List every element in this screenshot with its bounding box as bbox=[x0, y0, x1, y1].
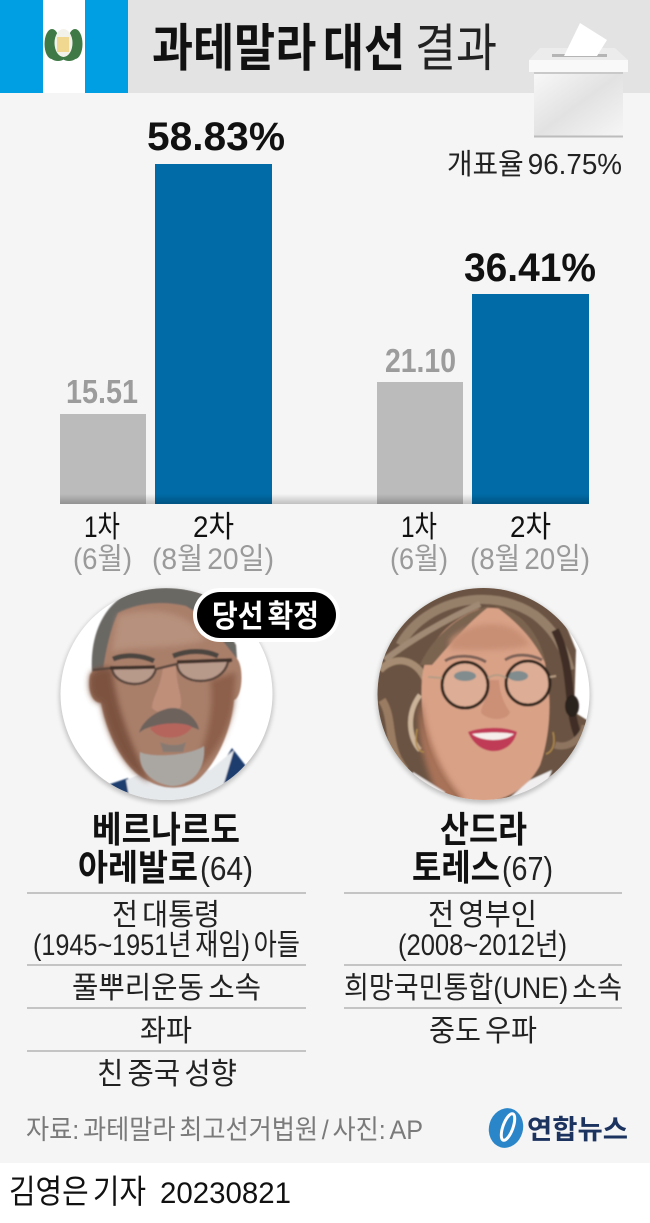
axis labels: Torres: (8월 20일) bbox=[470, 543, 590, 576]
logo: Yonhap News: 연합뉴스 bbox=[527, 1115, 628, 1145]
profile: Torres: 희망국민통합(UNE) 소속 bbox=[344, 972, 622, 1005]
profile: Arevalo: 풀뿌리운동 소속 bbox=[72, 972, 261, 1005]
icon: ballot box bbox=[529, 23, 628, 138]
value: round 2: 58.83% bbox=[147, 115, 285, 159]
logo: Yonhap News bbox=[484, 1104, 628, 1152]
badge: winner confirmed: 당선 확정 bbox=[212, 599, 319, 634]
axis labels: Torres bbox=[390, 511, 590, 576]
byline: 20230821 bbox=[160, 1177, 291, 1210]
profile: Torres bbox=[344, 899, 622, 1048]
badge: winner confirmed bbox=[193, 588, 340, 642]
profile: Arevalo: 친 중국 성향 bbox=[97, 1058, 237, 1091]
name: Bernardo Arevalo bbox=[78, 809, 253, 888]
profile: Torres: 전 영부인 bbox=[428, 899, 537, 932]
bar: round 1 bbox=[60, 414, 146, 504]
title: 결과 bbox=[415, 20, 497, 77]
byline bbox=[9, 1173, 291, 1210]
name: Bernardo Arevalo: 베르나르도 bbox=[92, 809, 240, 850]
title: 과테말라 대선 bbox=[152, 20, 405, 77]
profile: Torres: 중도 우파 bbox=[429, 1015, 537, 1048]
axis labels: Arevalo: (8월 20일) bbox=[152, 543, 274, 576]
icon: Guatemala flag bbox=[0, 0, 128, 93]
axis labels: Arevalo: 1차 bbox=[84, 511, 120, 544]
footer strip bbox=[0, 1163, 650, 1223]
axis labels: Torres: (6월) bbox=[390, 543, 448, 576]
portrait: Bernardo Arevalo bbox=[60, 588, 274, 803]
value: round 2: 36.41% bbox=[464, 246, 596, 290]
portrait: Sandra Torres bbox=[370, 585, 590, 803]
value: round 1: 15.51 bbox=[66, 373, 138, 410]
name: Sandra Torres: (67) bbox=[502, 850, 553, 887]
axis labels: Arevalo bbox=[73, 511, 274, 576]
name: Bernardo Arevalo: (64) bbox=[200, 850, 253, 887]
profile: Torres: (2008~2012년) bbox=[398, 929, 567, 962]
axis labels: Torres: 2차 bbox=[510, 511, 551, 544]
name: Bernardo Arevalo: 아레발로 bbox=[78, 847, 198, 888]
byline: 김영은 기자 bbox=[9, 1173, 146, 1210]
bar: round 2 bbox=[472, 294, 589, 504]
source note: 자료: 과테말라 최고선거법원 / 사진: AP bbox=[26, 1115, 423, 1145]
bar chart: Arevalo bbox=[60, 115, 285, 504]
name: Sandra Torres bbox=[412, 809, 553, 888]
axis labels: Torres: 1차 bbox=[401, 511, 437, 544]
profile: Arevalo: 좌파 bbox=[140, 1015, 192, 1048]
header band bbox=[128, 0, 650, 93]
bar chart: Torres bbox=[377, 246, 596, 504]
counting rate: 개표율 96.75% bbox=[447, 149, 622, 181]
name: Sandra Torres: 토레스 bbox=[412, 847, 500, 888]
profile: Arevalo bbox=[33, 899, 300, 1091]
axis labels: Arevalo: 2차 bbox=[193, 511, 234, 544]
bar: round 1 bbox=[377, 382, 463, 504]
profile: Arevalo: 전 대통령 bbox=[112, 899, 220, 932]
value: round 1: 21.10 bbox=[385, 342, 456, 379]
icon: logo globe bbox=[484, 1104, 528, 1152]
bar: round 2 bbox=[155, 164, 272, 504]
profile: Arevalo: (1945~1951년 재임) 아들 bbox=[33, 929, 300, 962]
axis labels: Arevalo: (6월) bbox=[73, 543, 132, 576]
name: Sandra Torres: 산드라 bbox=[440, 809, 527, 850]
